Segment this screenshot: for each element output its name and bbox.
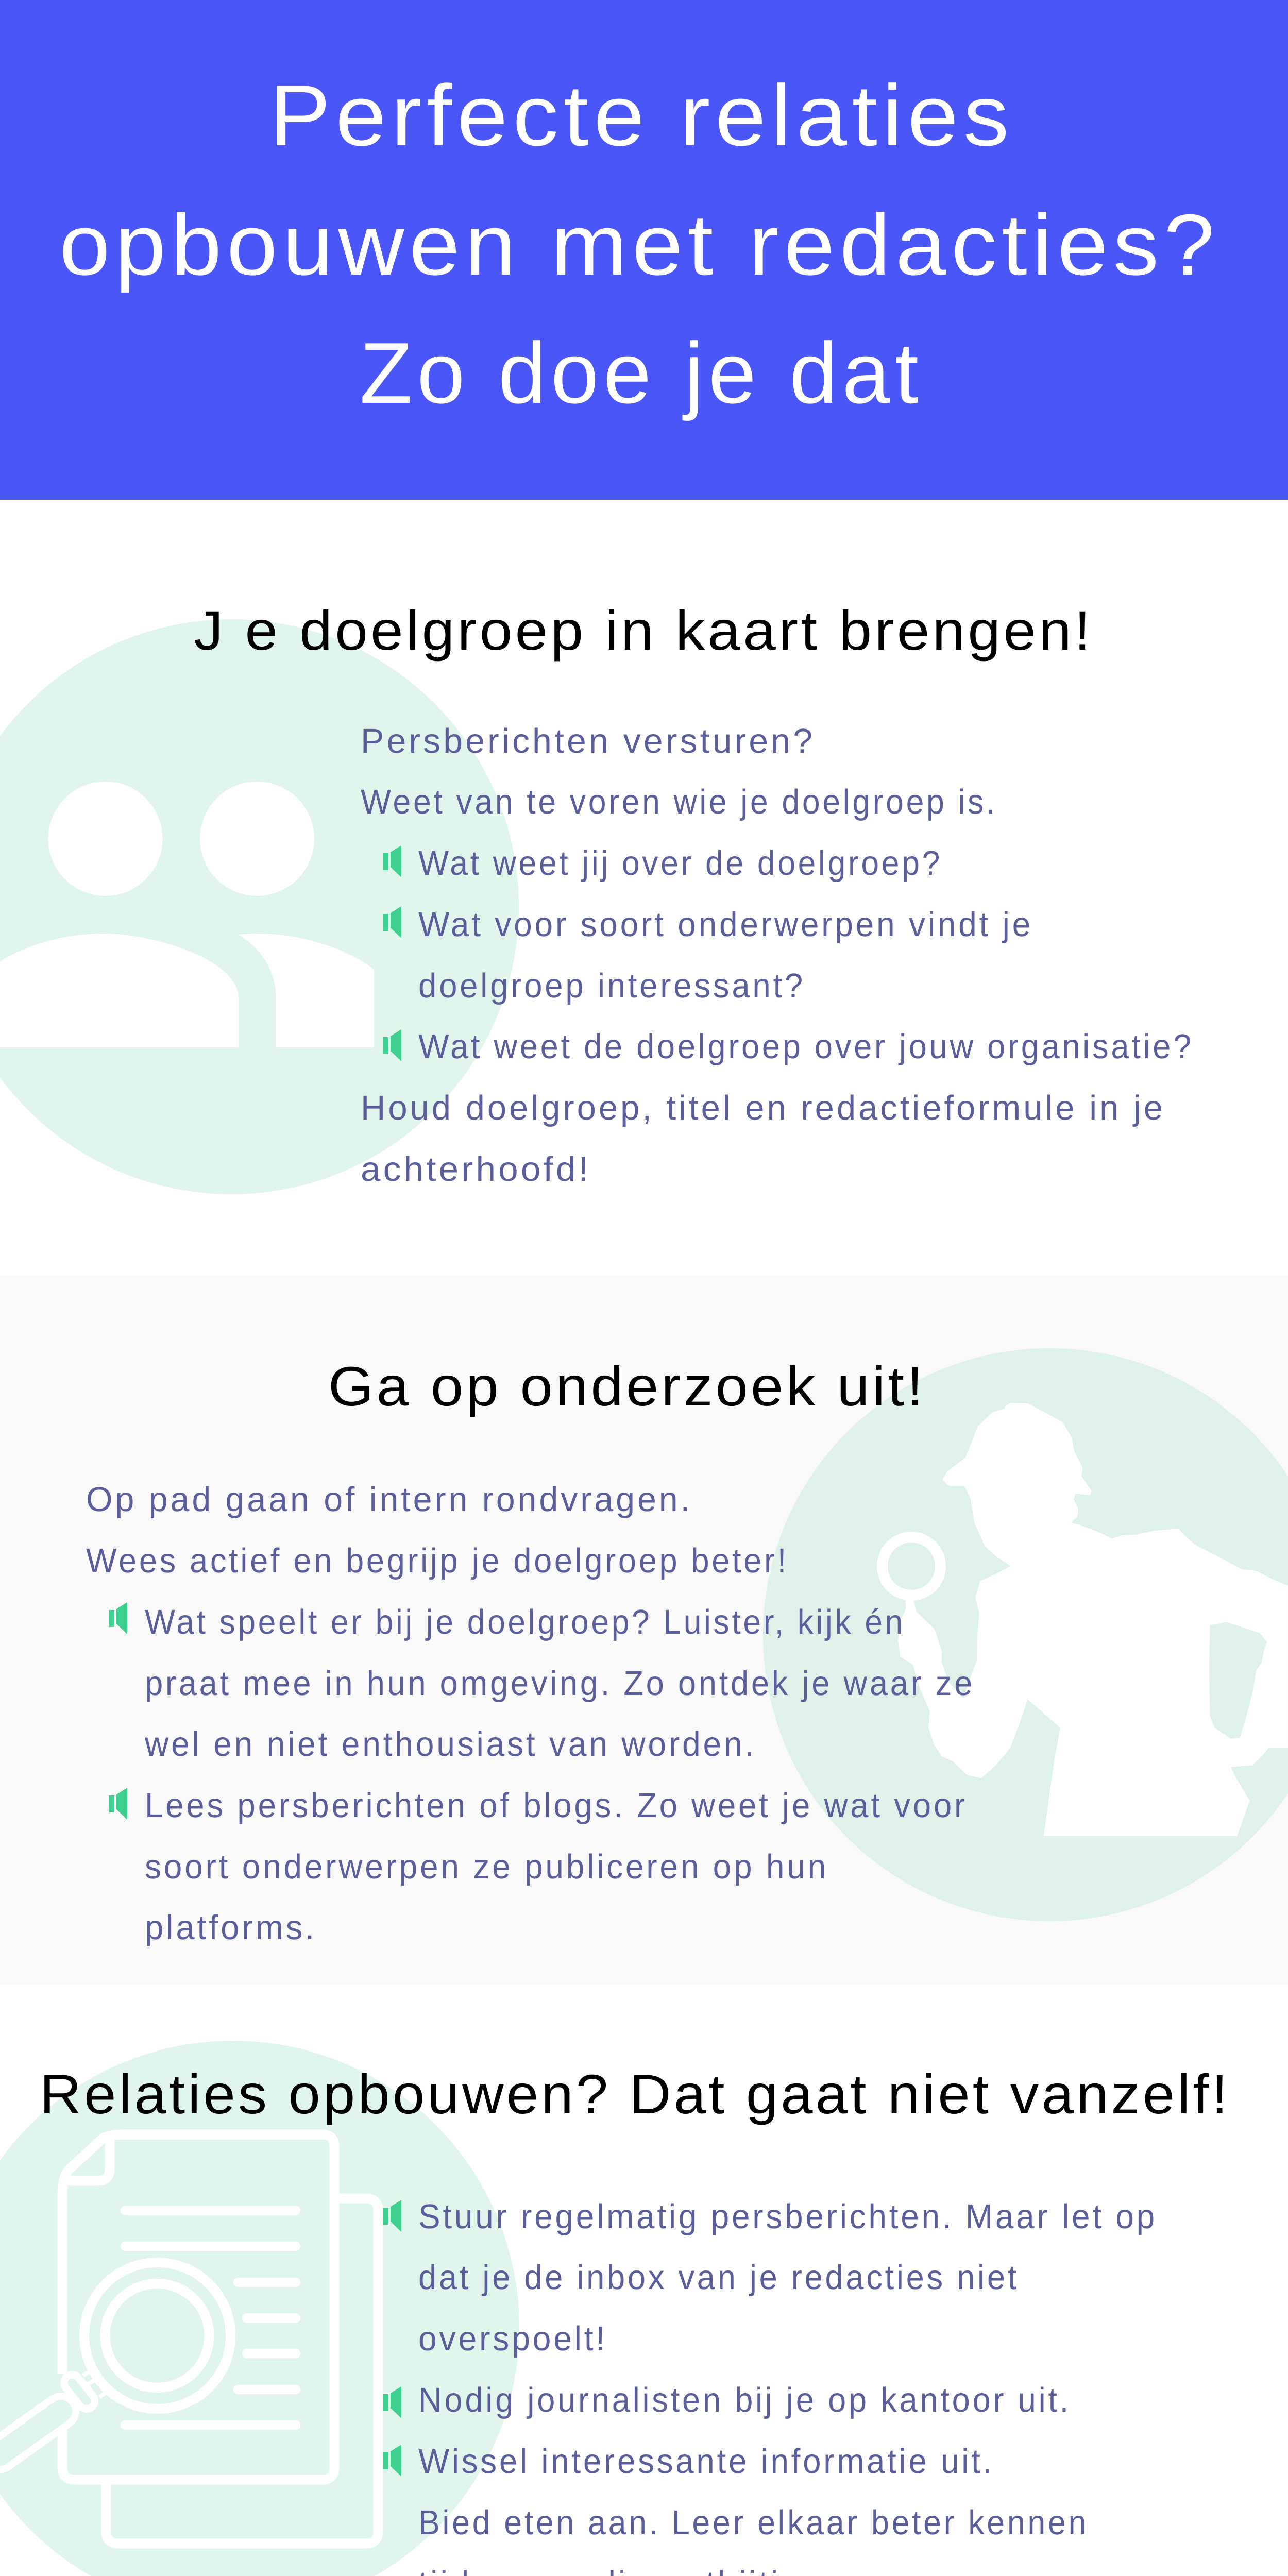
background circle: relaties bbox=[0, 2041, 519, 2576]
text block: relaties: Wissel interessante informatie uit. bbox=[418, 2442, 994, 2481]
bullets: doelgroep bbox=[383, 845, 401, 1061]
text block: relaties: dat je de inbox van je redacties niet bbox=[418, 2258, 1019, 2297]
icon: detective silhouette bbox=[882, 1403, 1288, 1836]
icon: two people bbox=[0, 782, 374, 1047]
background circle: doelgroep bbox=[0, 619, 519, 1194]
text block: relaties: overspoelt! bbox=[418, 2319, 607, 2358]
text block: onderzoek bbox=[86, 1480, 975, 1947]
text block: doelgroep: Houd doelgroep, titel en redactieformule in je bbox=[361, 1089, 1165, 1127]
background circle: onderzoek bbox=[763, 1348, 1288, 1921]
text block: relaties: Stuur regelmatig persberichten. Maar let op bbox=[418, 2197, 1157, 2236]
text block: doelgroep: Wat weet jij over de doelgroep? bbox=[418, 844, 942, 883]
text block: doelgroep: Wat weet de doelgroep over jouw organisatie? bbox=[418, 1027, 1194, 1066]
title bbox=[59, 67, 1219, 421]
title: Zo doe je dat bbox=[360, 325, 923, 421]
panel: je doelgroep in kaart brengen bbox=[0, 599, 1194, 1194]
text block: relaties: Bied eten aan. Leer elkaar beter kennen bbox=[418, 2503, 1089, 2542]
text block: relaties: Nodig journalisten bij je op kantoor uit. bbox=[418, 2381, 1071, 2419]
text block: onderzoek: soort onderwerpen ze publiceren op hun bbox=[145, 1848, 828, 1886]
text block: doelgroep: achterhoofd! bbox=[361, 1150, 591, 1189]
text block: onderzoek: wel en niet enthousiast van worden. bbox=[144, 1725, 756, 1764]
heading: doelgroep: J e doelgroep in kaart brengen! bbox=[194, 599, 1093, 662]
text block: doelgroep: Persberichten versturen? bbox=[361, 722, 815, 760]
text block: onderzoek: Lees persberichten of blogs. Zo weet je wat voor bbox=[145, 1786, 968, 1825]
heading: relaties: Relaties opbouwen? Dat gaat niet vanzelf! bbox=[40, 2063, 1230, 2125]
panel: ga op onderzoek uit bbox=[0, 1276, 1288, 1985]
text block: onderzoek: platforms. bbox=[145, 1908, 317, 1947]
text block: onderzoek: Wat speelt er bij je doelgroep? Luister, kijk én bbox=[145, 1603, 905, 1641]
bullets: onderzoek bbox=[109, 1602, 127, 1820]
text block: doelgroep: Wat voor soort onderwerpen vindt je bbox=[418, 905, 1033, 944]
text block: onderzoek: Wees actief en begrijp je doelgroep beter! bbox=[86, 1541, 789, 1580]
heading: onderzoek: Ga op onderzoek uit! bbox=[328, 1355, 926, 1417]
icon: document with magnifier bbox=[0, 2134, 378, 2544]
text block: doelgroep: Weet van te voren wie je doelgroep is. bbox=[361, 783, 997, 821]
header banner bbox=[0, 0, 1288, 500]
text block: onderzoek: praat mee in hun omgeving. Zo ontdek je waar ze bbox=[145, 1664, 975, 1703]
panel: relaties opbouwen bbox=[0, 2041, 1230, 2576]
bullets: relaties bbox=[383, 2200, 401, 2477]
text block: doelgroep bbox=[361, 722, 1194, 1189]
text block: onderzoek: Op pad gaan of intern rondvragen. bbox=[86, 1480, 692, 1519]
title: Perfecte relaties bbox=[269, 67, 1014, 164]
text block: doelgroep: doelgroep interessant? bbox=[418, 967, 805, 1005]
title: opbouwen met redacties? bbox=[59, 196, 1219, 293]
text block: relaties bbox=[418, 2197, 1157, 2576]
